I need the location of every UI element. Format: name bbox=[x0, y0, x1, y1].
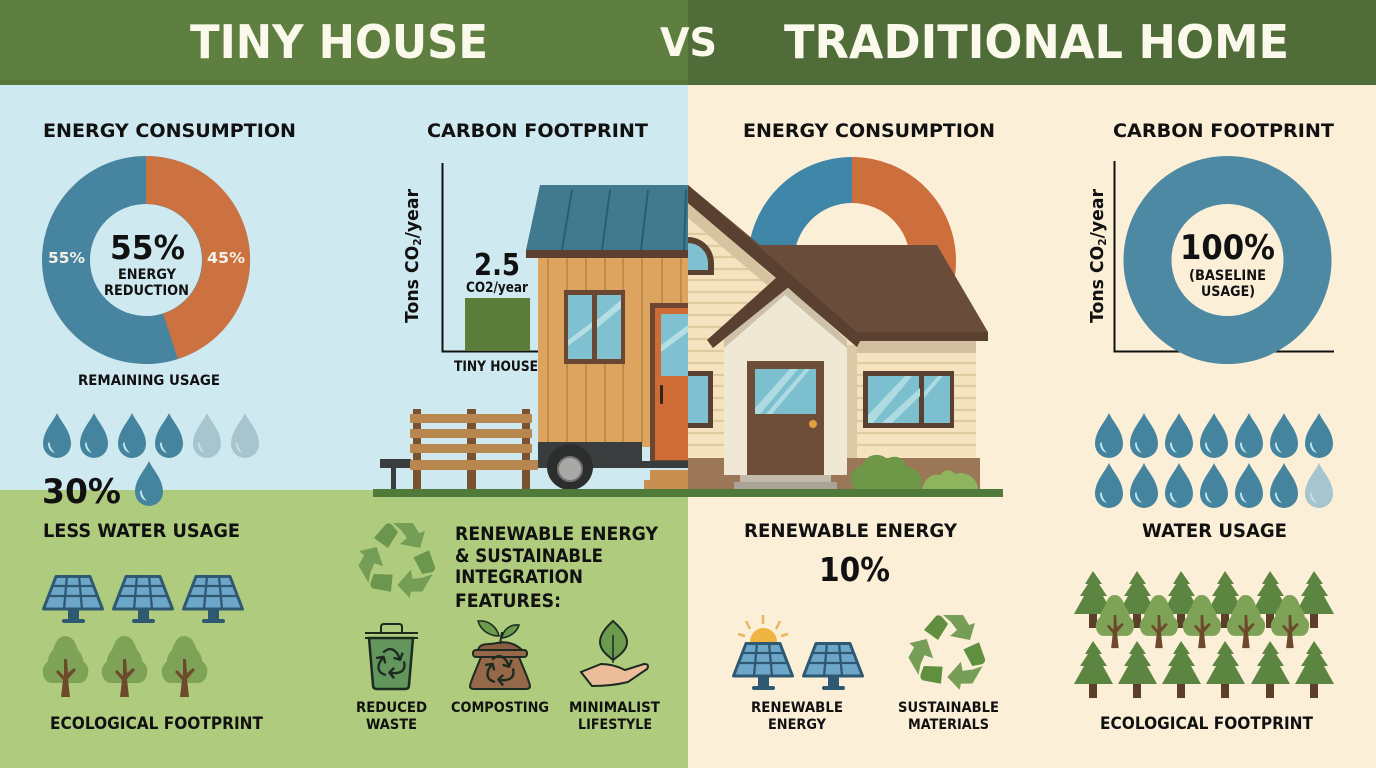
label: ENERGY bbox=[768, 717, 827, 733]
label: LESS WATER USAGE bbox=[43, 520, 240, 542]
features heading: RENEWABLE ENERGY bbox=[455, 524, 659, 545]
gable trim bbox=[707, 277, 790, 348]
label: ECOLOGICAL FOOTPRINT bbox=[50, 714, 263, 734]
wall shadow under eaves bbox=[857, 341, 976, 353]
axes bbox=[442, 163, 540, 352]
trailer chassis bbox=[538, 442, 688, 468]
label: minimalist lifestyle: MINIMALIST bbox=[569, 700, 660, 716]
heading: ENERGY CONSUMPTION bbox=[43, 120, 296, 142]
roof bbox=[526, 185, 688, 250]
donut 100% bbox=[1148, 180, 1308, 340]
panel: traditional carbon footprint bbox=[1087, 120, 1334, 352]
axes bbox=[1114, 161, 1334, 352]
features heading: INTEGRATION bbox=[455, 567, 583, 588]
house body bbox=[538, 257, 688, 447]
features heading: FEATURES: bbox=[455, 591, 561, 612]
icon: leaf in hand bbox=[581, 621, 648, 686]
icon: composting bbox=[470, 621, 530, 689]
siding seams bbox=[548, 257, 681, 443]
illustration: tiny house bbox=[380, 185, 688, 490]
foundation bbox=[688, 458, 980, 489]
features heading: & SUSTAINABLE bbox=[455, 546, 603, 567]
heading: CARBON FOOTPRINT bbox=[1113, 120, 1334, 142]
stat: 10% bbox=[819, 550, 890, 589]
solar panels bbox=[44, 576, 242, 623]
label: reduced waste bbox=[356, 700, 427, 733]
donut chart: 45% bbox=[207, 249, 245, 267]
panel: tiny house energy consumption bbox=[43, 120, 296, 389]
label: minimalist lifestyle: LIFESTYLE bbox=[578, 717, 652, 733]
icon: recycling bbox=[352, 523, 442, 602]
panel: traditional renewable energy bbox=[734, 520, 999, 733]
bar value: 2.5 bbox=[474, 248, 520, 283]
siding wall bbox=[688, 195, 976, 460]
steps bbox=[644, 470, 688, 490]
heading: CARBON FOOTPRINT bbox=[427, 120, 648, 142]
axis label: /year bbox=[1087, 189, 1108, 238]
eave shadow on left wing bbox=[688, 203, 782, 291]
panel: traditional ecological footprint bbox=[1074, 571, 1334, 734]
trees bbox=[43, 636, 207, 697]
axis label: Tons CO bbox=[1087, 242, 1108, 323]
forest bbox=[1074, 571, 1334, 698]
bar bbox=[465, 298, 530, 351]
label: RENEWABLE bbox=[751, 700, 843, 716]
donut chart bbox=[48, 156, 250, 359]
heading: RENEWABLE ENERGY bbox=[744, 520, 957, 542]
label: reduced waste: REDUCED bbox=[356, 700, 427, 716]
bench bbox=[410, 409, 538, 489]
donut chart: 55% bbox=[110, 228, 185, 267]
donut 100%: (BASELINE bbox=[1189, 268, 1266, 284]
porch side shadow bbox=[847, 345, 857, 458]
water drops bbox=[43, 413, 259, 506]
bar label: TINY HOUSE bbox=[454, 359, 538, 375]
gable shadow bbox=[724, 285, 847, 348]
front door bbox=[747, 361, 824, 475]
water drops bbox=[1095, 413, 1333, 508]
ground line bbox=[373, 489, 1003, 497]
main roof bbox=[688, 185, 988, 347]
roof seams bbox=[562, 190, 686, 250]
title: traditional home: TRADITIONAL HOME bbox=[784, 15, 1289, 69]
porch steps bbox=[740, 475, 831, 482]
axis label: 2 bbox=[411, 238, 424, 246]
heading: ENERGY CONSUMPTION bbox=[743, 120, 995, 142]
bushes bbox=[851, 455, 978, 489]
arched window bbox=[688, 237, 714, 275]
panel: traditional energy consumption bbox=[743, 120, 995, 365]
title: tiny house: TINY HOUSE bbox=[190, 15, 488, 69]
donut chart, partly behind house bbox=[748, 157, 956, 365]
window bbox=[564, 290, 625, 364]
icon: waste bin bbox=[365, 624, 418, 689]
siding stripes bbox=[688, 234, 976, 445]
door bbox=[650, 303, 688, 461]
caption: REMAINING USAGE bbox=[78, 373, 220, 389]
label: MATERIALS bbox=[908, 717, 989, 733]
tow hitch bbox=[380, 459, 411, 489]
axis label: 2 bbox=[1096, 238, 1109, 246]
axis label: Tons CO bbox=[402, 242, 423, 323]
axis label: /year bbox=[402, 189, 423, 238]
solar panels bbox=[734, 643, 862, 690]
bar unit: CO2/year bbox=[466, 280, 528, 296]
icon: recycling bbox=[902, 615, 992, 694]
roof fascia bbox=[526, 250, 688, 258]
donut chart: ENERGY bbox=[118, 267, 177, 283]
features heading bbox=[455, 524, 659, 612]
label: composting: COMPOSTING bbox=[451, 700, 549, 716]
donut chart: REDUCTION bbox=[104, 283, 189, 299]
right window bbox=[863, 371, 954, 428]
panel: tiny house carbon footprint bbox=[402, 120, 648, 375]
donut 100%: 100% bbox=[1180, 228, 1275, 268]
icon: sun bbox=[738, 615, 788, 642]
label: SUSTAINABLE bbox=[898, 700, 999, 716]
header banner bbox=[0, 0, 1376, 85]
roof ridge band bbox=[688, 185, 860, 347]
label: reduced waste: WASTE bbox=[366, 717, 417, 733]
roof fascia bbox=[851, 332, 988, 347]
panel: tiny house ecological footprint bbox=[43, 576, 263, 734]
porch gable bbox=[724, 287, 847, 475]
label bbox=[751, 700, 843, 733]
left window bbox=[688, 371, 713, 428]
panel: tiny house water usage bbox=[42, 413, 259, 542]
donut chart: 55% bbox=[48, 249, 85, 267]
label: ECOLOGICAL FOOTPRINT bbox=[1100, 714, 1313, 734]
panel: sustainable features bbox=[352, 523, 660, 733]
title: vs: VS bbox=[660, 21, 717, 66]
label bbox=[898, 700, 999, 733]
donut 100%: USAGE) bbox=[1201, 284, 1255, 300]
stat: 30% bbox=[42, 472, 121, 512]
wheel bbox=[547, 444, 593, 490]
label: minimalist lifestyle bbox=[569, 700, 660, 733]
panel: traditional water usage bbox=[1095, 413, 1333, 542]
label: WATER USAGE bbox=[1142, 520, 1287, 542]
illustration: traditional home bbox=[688, 185, 988, 489]
